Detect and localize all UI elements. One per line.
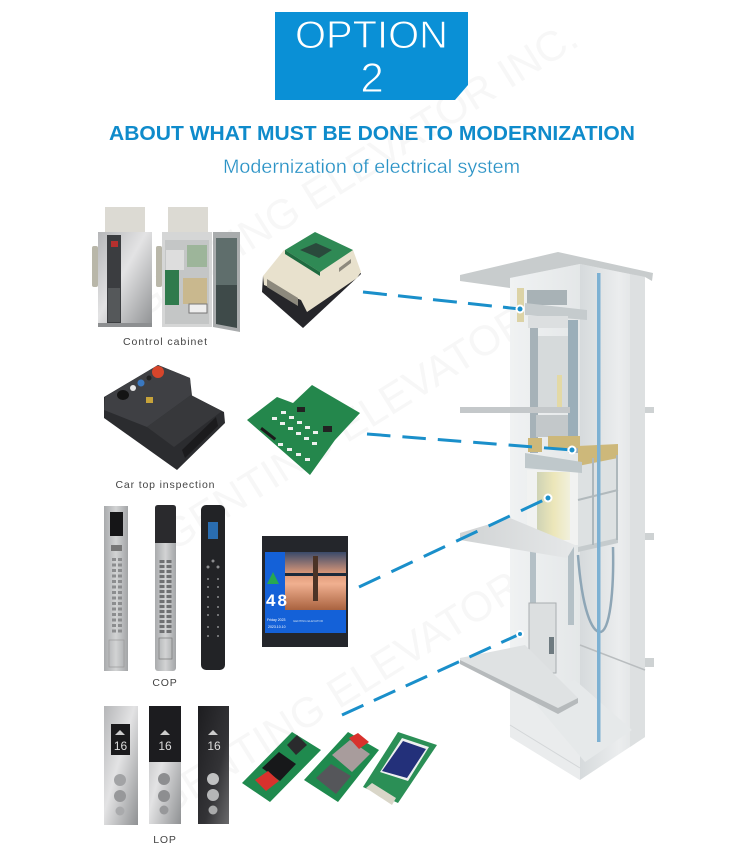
panel: COP [104,505,225,689]
icon: dot matrix board [304,732,379,802]
panel: display screen: 48 [266,591,289,610]
roof slab [460,252,653,288]
watermark: GENTING ELEVATOR INC. [153,244,619,560]
blue rope [597,273,600,742]
arrow: boards to landing [342,631,523,715]
arrow: control cabinet to machine room [363,292,524,312]
shaft walls [510,264,645,780]
panel: LOP [104,706,229,846]
icon: steel panel [104,506,128,671]
label: Car top inspection [116,479,215,491]
slab stubs [645,407,654,667]
banner: option 2 [275,12,468,101]
watermark [120,12,619,826]
banner: option 2: OPTION [295,14,448,57]
arrow: screen to car interior [359,494,552,587]
guide rails [530,320,578,655]
panel: control cabinet [92,207,361,348]
counterweight [536,415,568,437]
subheading: Modernization of electrical system [223,157,520,178]
icon: open cabinet [156,207,240,332]
machine and beam [517,288,587,328]
landing door [529,603,556,673]
panel: car top inspection [104,365,360,491]
label: COP [152,677,178,689]
icon: black landing panel: 16 [207,739,221,753]
icon: segment display board [242,732,321,802]
arrow: car top to car [367,434,576,454]
icon: drive unit [262,232,361,328]
elevator car [525,436,618,552]
icon: inspection box [104,365,225,470]
panel: display screen [262,536,348,647]
label: Control cabinet [123,336,207,348]
floor slab 3 [460,518,575,558]
panel: display screen: GENTING ELEVATOR [293,619,324,623]
floor slab 2 [460,407,570,413]
icon: black panel [201,505,225,670]
panel: display screen: 2023.10.10 [268,625,286,629]
icon: LCD board [363,732,437,805]
travelling cable [578,547,613,632]
watermark: GENTING ELEVATOR INC. [120,12,586,328]
banner: option 2: 2 [360,54,384,101]
icon: black and steel landing panel: 16 [158,739,172,753]
floor slab 4 [460,645,578,714]
icon: circuit board [247,385,360,475]
illustration: elevator shaft [460,252,654,780]
heading: ABOUT WHAT MUST BE DONE TO MODERNIZATION [109,123,635,145]
label: LOP [153,834,177,846]
panel: display screen: Friday 2023 [267,618,286,622]
icon: steel landing panel: 16 [114,739,127,753]
icon: closed cabinet [92,207,152,327]
watermark: GENTING ELEVATOR INC. [145,510,611,826]
icon: steel and black panel [155,505,176,671]
panel: display boards [242,732,437,805]
